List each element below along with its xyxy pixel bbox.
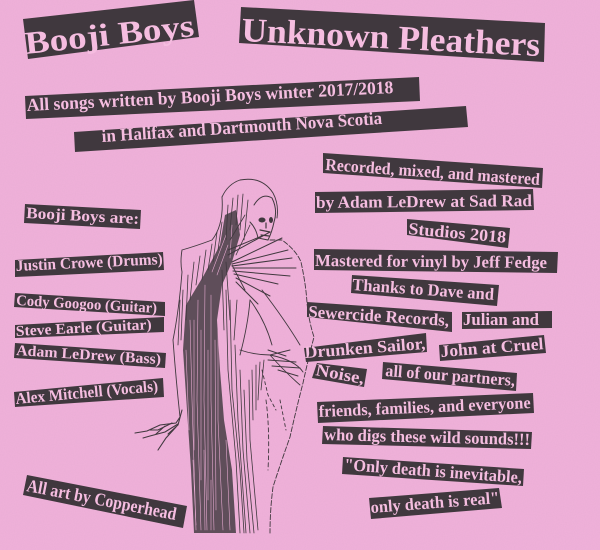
- illustration: hooded skeleton reaper: [135, 179, 314, 533]
- text strip: thanks: Thanks to Dave and: [352, 275, 495, 304]
- text strip: all of our partners: all of our partners,: [385, 361, 516, 390]
- text strip: drunken sailor: Drunken Sailor,: [304, 334, 426, 362]
- member: Justin Crowe: Justin Crowe (Drums): [15, 251, 163, 275]
- skull: [250, 196, 276, 240]
- member: Alex Mitchell: Alex Mitchell (Vocals): [15, 378, 159, 408]
- band heading: Booji Boys are: Booji Boys are:: [26, 205, 140, 228]
- member: Adam LeDrew: Adam LeDrew (Bass): [16, 343, 161, 368]
- robe outline and folds: [173, 179, 314, 533]
- text strip: julian and: Julian and: [463, 310, 540, 329]
- text strip: location: in Halifax and Dartmouth Nova Scotia: [101, 108, 383, 146]
- text strip: wild sounds: who digs these wild sounds!!!: [324, 425, 530, 449]
- text strip: mastered for vinyl: Mastered for vinyl by Jeff Fedge: [315, 251, 548, 272]
- text strip: location: [74, 106, 468, 152]
- robe streak highlights: [186, 225, 232, 530]
- bony hand: [135, 410, 182, 450]
- title: Unknown Pleathers: Unknown Pleathers: [241, 12, 541, 64]
- text strip: noise: Noise,: [314, 360, 366, 388]
- quote line two: only death is real": [370, 488, 500, 517]
- radiating chest folds: [228, 232, 300, 376]
- quote line one: "Only death is inevitable,: [344, 455, 523, 487]
- text strip: songs written: All songs written by Booji Boys winter 2017/2018: [26, 77, 394, 115]
- robe vertical hatching: [178, 194, 264, 533]
- robe dark mass: [183, 210, 240, 533]
- text strip: friends families: friends, families, and everyone: [318, 393, 531, 421]
- text strip: studios: Studios 2018: [408, 219, 507, 247]
- text strip: john at cruel: John at Cruel: [440, 334, 544, 361]
- member: Cody Googoo: Cody Googoo (Guitar): [16, 293, 157, 317]
- member: Steve Earle: Steve Earle (Guitar): [15, 317, 152, 340]
- title: Booji Boys: Booji Boys: [23, 7, 196, 61]
- credit: art by Copperhead: All art by Copperhead: [25, 475, 178, 524]
- text strip: sewercide records: Sewercide Records,: [308, 302, 450, 330]
- text strip: recorded: Recorded, mixed, and mastered: [325, 155, 541, 189]
- text strip: by Adam LeDrew: by Adam LeDrew at Sad Rad: [316, 191, 533, 212]
